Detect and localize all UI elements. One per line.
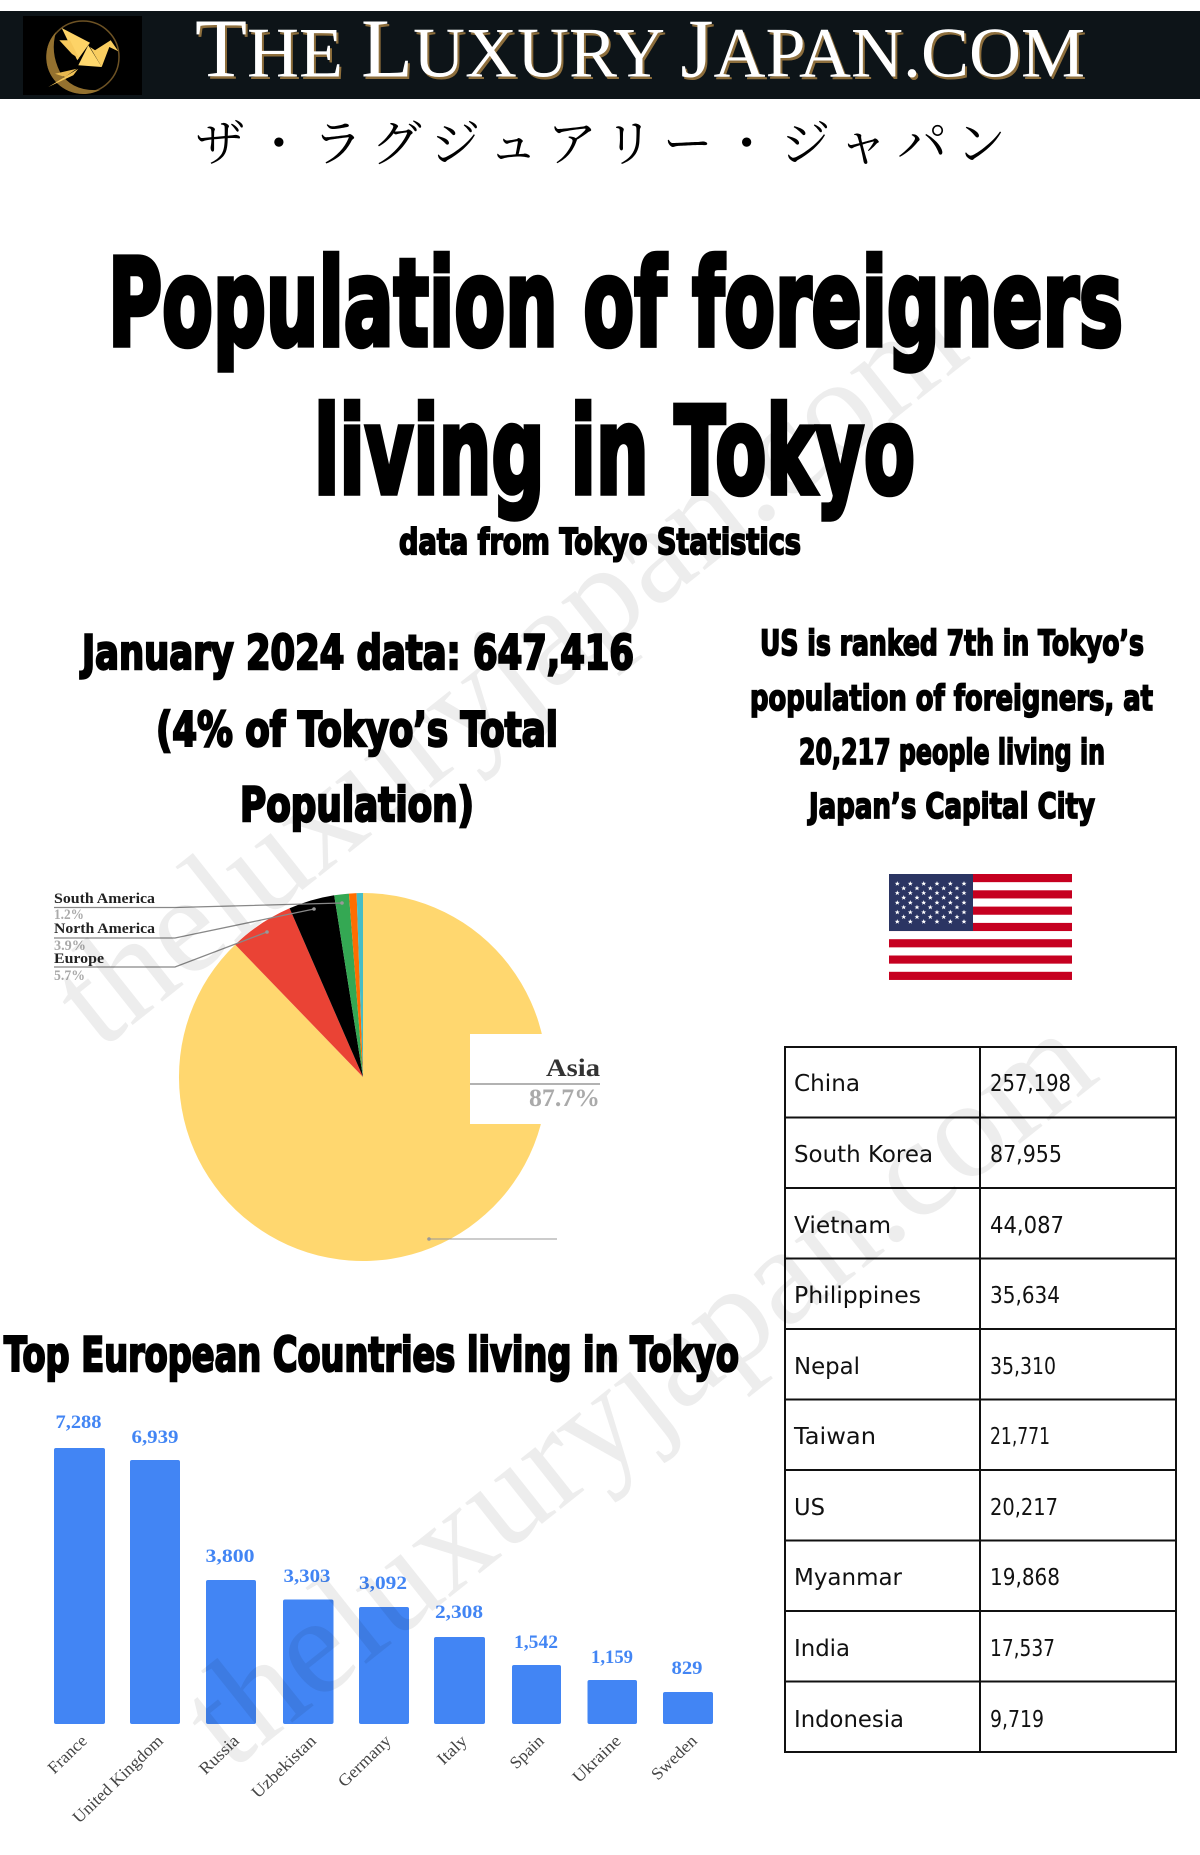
bar: Sweden: Sweden	[647, 1731, 701, 1784]
row: Indonesia	[794, 1707, 1044, 1733]
header banner	[0, 2, 1200, 99]
brand wordmark: THE LUXURY JAPAN.COM	[195, 2, 1085, 96]
row: China: 257,198	[990, 1071, 1071, 1097]
leader line: Asia	[427, 1237, 557, 1241]
label: Europe	[54, 930, 269, 984]
bar: Ukraine: 1,159	[591, 1647, 633, 1668]
heading: January 2024 data: January 2024 data: 647,416	[80, 626, 634, 681]
row: Philippines: Philippines	[794, 1283, 921, 1309]
row: Myanmar: 19,868	[990, 1565, 1060, 1591]
heading: US rank	[750, 624, 1153, 827]
bar: France: 7,288	[56, 1412, 102, 1433]
watermark: lower diagonal: theluxuryjapan.com	[153, 981, 1122, 1796]
row: Indonesia: 9,719	[990, 1707, 1044, 1733]
label: Asia: 87.7%	[529, 1085, 600, 1112]
bar chart: top European countries	[44, 1412, 713, 1827]
bar: Uzbekistan: Uzbekistan	[248, 1731, 320, 1802]
icon: US flag	[889, 874, 1072, 980]
label: South America: 1.2%	[54, 907, 84, 923]
label: Europe: Europe	[54, 951, 104, 967]
bar: Italy: Italy	[433, 1731, 471, 1768]
pie slice: Europe	[235, 908, 363, 1077]
bar: Sweden: 829	[672, 1658, 702, 1679]
bar: Germany	[334, 1573, 409, 1791]
row: US: 20,217	[990, 1495, 1058, 1521]
row: Taiwan: Taiwan	[793, 1424, 876, 1450]
bar: United Kingdom: 6,939	[132, 1427, 178, 1448]
bar: Spain: Spain	[506, 1731, 548, 1773]
pie slice: North America	[290, 895, 363, 1077]
bar: Spain: 1,542	[514, 1632, 558, 1653]
watermark: upper diagonal: theluxuryjapan.com	[23, 260, 992, 1075]
label: Europe: 5.7%	[54, 968, 85, 984]
row: India: 17,537	[990, 1636, 1055, 1662]
bar: Italy: 2,308	[435, 1602, 483, 1623]
bar: United Kingdom: United Kingdom	[69, 1731, 167, 1827]
heading: January 2024 data	[80, 626, 634, 833]
bar: Italy	[433, 1602, 485, 1768]
heading: top European countries: Top European Countries living in Tokyo	[4, 1328, 739, 1383]
row: US	[794, 1495, 1058, 1521]
row: South Korea: 87,955	[990, 1142, 1062, 1168]
bar: Germany: 3,092	[359, 1573, 407, 1594]
bar: Germany: Germany	[334, 1731, 395, 1791]
row: Myanmar: Myanmar	[794, 1565, 903, 1591]
bar: United Kingdom	[69, 1427, 180, 1827]
row: Philippines	[794, 1283, 1060, 1309]
row: South Korea: South Korea	[794, 1142, 933, 1168]
pie chart: population by region	[54, 891, 601, 1261]
main title	[108, 235, 1123, 522]
brand wordmark: THE LUXURY JAPAN.COM	[197, 5, 1087, 98]
table: top countries by population	[785, 1047, 1176, 1752]
bar: France	[44, 1412, 105, 1778]
pie slice: orange segment	[349, 893, 363, 1077]
heading: January 2024 data: Population)	[240, 778, 474, 833]
row: Vietnam: 44,087	[990, 1213, 1064, 1239]
row: South Korea	[794, 1142, 1062, 1168]
row: Vietnam: Vietnam	[794, 1213, 891, 1239]
row: Nepal	[794, 1354, 1056, 1380]
bar: Uzbekistan	[248, 1566, 334, 1802]
bar: Ukraine: Ukraine	[568, 1731, 625, 1787]
bar: Ukraine	[568, 1647, 637, 1787]
bar: Russia: 3,800	[206, 1546, 254, 1567]
row: Nepal: 35,310	[990, 1354, 1056, 1380]
heading: January 2024 data: (4% of Tokyo’s Total	[156, 703, 558, 758]
icon: origami crane logo	[23, 16, 142, 95]
label: North America	[54, 907, 316, 954]
bar: France: France	[44, 1731, 91, 1778]
japanese brand name: ザ・ラグジュアリー・ジャパン	[195, 116, 1006, 172]
label: South America: South America	[54, 891, 156, 907]
row: China	[794, 1071, 1071, 1097]
row: Myanmar	[794, 1565, 1060, 1591]
row: Vietnam	[794, 1213, 1064, 1239]
row: Philippines: 35,634	[990, 1283, 1060, 1309]
label: Asia	[470, 1034, 601, 1124]
pie slice: teal segment	[357, 893, 363, 1077]
row: India: India	[794, 1636, 850, 1662]
pie slice: South America	[334, 894, 363, 1077]
row: Taiwan: 21,771	[990, 1424, 1050, 1450]
label: South America	[54, 891, 344, 923]
label: North America: North America	[54, 921, 156, 937]
row: India	[794, 1636, 1055, 1662]
row: Nepal: Nepal	[794, 1354, 860, 1380]
bar: Uzbekistan: 3,303	[284, 1566, 330, 1587]
row: Indonesia: Indonesia	[794, 1707, 904, 1733]
row: US: US	[794, 1495, 825, 1521]
row: China: China	[794, 1071, 860, 1097]
label: Asia: Asia	[546, 1055, 601, 1082]
row: Taiwan	[793, 1424, 1050, 1450]
bar: Russia: Russia	[195, 1731, 243, 1778]
heading: US rank: Japan’s Capital City	[808, 787, 1095, 827]
bar: Russia	[195, 1546, 256, 1778]
bar: Sweden	[647, 1658, 713, 1784]
label: North America: 3.9%	[54, 938, 86, 954]
pie slice: Asia	[179, 893, 547, 1261]
bar: Spain	[506, 1632, 561, 1773]
subtitle: data source: data from Tokyo Statistics	[399, 522, 801, 563]
